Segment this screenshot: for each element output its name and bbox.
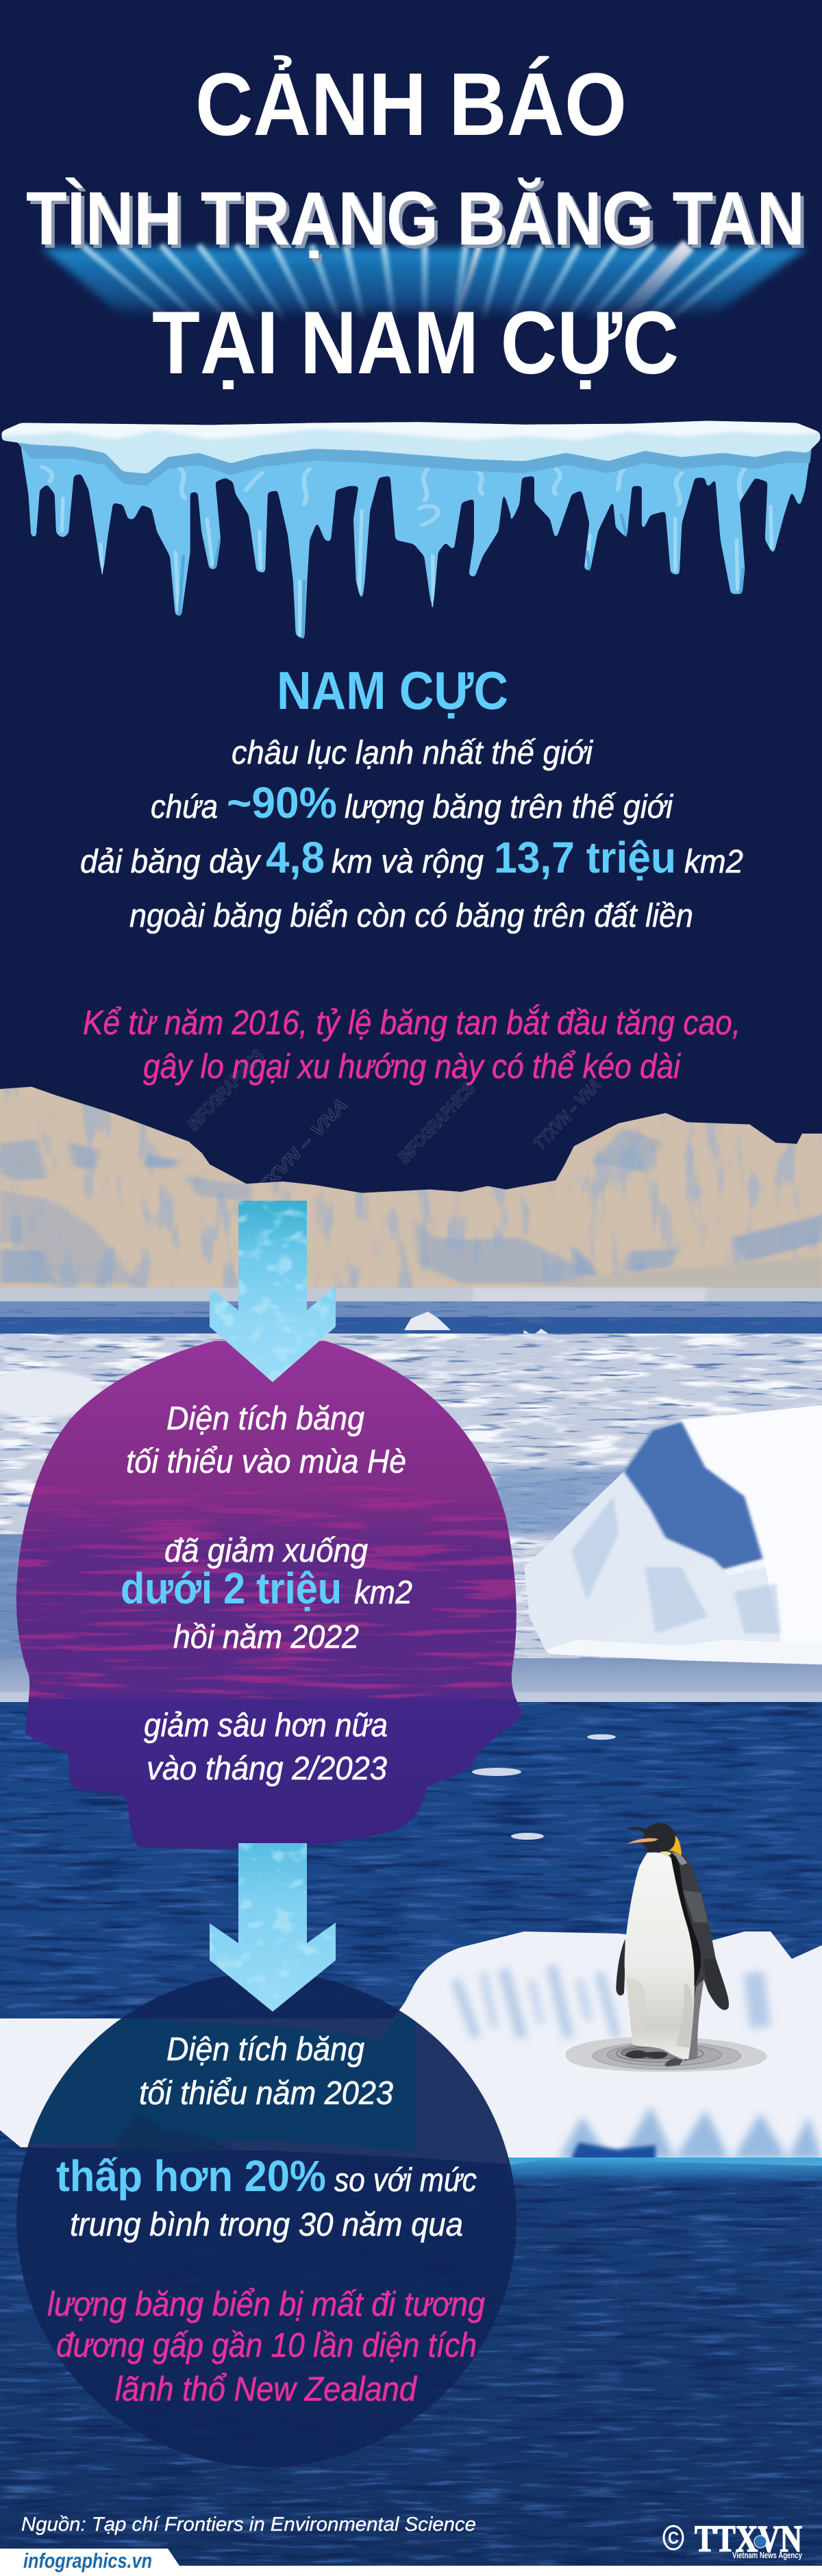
icon: emperor penguin	[566, 1823, 767, 2072]
distant mountains	[0, 1082, 822, 1295]
iceberg	[524, 1405, 822, 1664]
line: ice sheet size: km2	[684, 844, 743, 880]
line: ice sheet size	[80, 833, 743, 882]
circle text: đương gấp gần 10 lần diện tích	[56, 2326, 477, 2364]
light glow under the title	[42, 245, 807, 323]
dark neck stripe	[670, 1853, 701, 1986]
snow cap white top	[2, 421, 820, 440]
blob text: giảm sâu hơn nữa	[144, 1708, 388, 1744]
snow cap	[2, 421, 820, 473]
globe in the V	[754, 2536, 767, 2548]
line: land ice: ngoài băng biển còn có băng trên đất liền	[129, 898, 693, 934]
agency name: Vietnam News Agency	[732, 2551, 802, 2560]
line: ice sheet size: 13,7 triệu	[494, 833, 676, 882]
circle text: thấp hơn 20%	[56, 2151, 326, 2201]
pink callout	[83, 1003, 740, 1086]
circle text: Diện tích băng	[166, 2031, 364, 2068]
sea	[0, 1288, 822, 2576]
icon: icicles with snow cap	[2, 421, 820, 639]
blob text: Diện tích băng	[166, 1401, 364, 1437]
ground shadow	[566, 2037, 767, 2072]
blob text: vào tháng 2/2023	[147, 1751, 387, 1787]
copyright mark: C	[668, 2529, 679, 2548]
belly	[625, 1853, 695, 2060]
watermarks: TTXVN – VNA	[244, 1095, 351, 1208]
blob text	[121, 1401, 412, 1787]
orange beak	[627, 1838, 658, 1844]
yellow ear patch	[669, 1836, 682, 1855]
line: 90 percent of the ice	[151, 778, 673, 827]
watermarks: INFOGRAPHICS	[184, 1046, 268, 1134]
blob text: km2	[354, 1575, 412, 1611]
snow cap shadow layer	[2, 421, 820, 473]
hazy foreground hill	[544, 1257, 822, 1288]
left flipper	[616, 1939, 625, 1995]
pink callout: gây lo ngại xu hướng này có thể kéo dài	[143, 1047, 682, 1086]
logo: TTXVN	[664, 2518, 802, 2560]
purple melting shape	[0, 1336, 548, 1856]
small ice floes on the sea	[472, 1734, 616, 1840]
dark blue ice cave	[571, 2142, 656, 2162]
watermarks: TTXVN – VNA	[530, 1075, 605, 1153]
title line 1: CẢNH BÁO	[195, 54, 627, 154]
line: 90 percent of the ice: ~90%	[227, 778, 337, 827]
title line 3: TẠI NAM CỰC	[152, 292, 679, 392]
copyright mark	[664, 2526, 683, 2549]
circle text: tối thiểu năm 2023	[139, 2075, 393, 2112]
shoreline ice and blue water bands	[0, 1288, 822, 1348]
arrow: first ice arrow	[206, 1199, 342, 1384]
blob text: tối thiểu vào mùa Hè	[126, 1444, 406, 1480]
arrow: second ice arrow	[210, 1843, 336, 2012]
feet	[625, 2050, 668, 2059]
circle text: trung bình trong 30 năm qua	[70, 2207, 463, 2243]
back and wing	[670, 1851, 729, 2060]
blob text: hồi năm 2022	[173, 1619, 359, 1655]
foreground ice floe	[0, 1931, 822, 2186]
circle text: lượng băng biển bị mất đi tương	[47, 2285, 485, 2323]
dark circle	[0, 1973, 516, 2467]
pink callout: Kể từ năm 2016, tỷ lệ băng tan bắt đầu tăng cao,	[83, 1003, 740, 1042]
line: 90 percent of the ice: lượng băng trên thế giới	[345, 789, 673, 825]
line: ice sheet size: 4,8	[266, 833, 325, 882]
title	[26, 54, 808, 392]
blob text: đã giảm xuống	[164, 1533, 368, 1569]
source line: Nguồn: Tạp chí Frontiers in Environmental Science	[21, 2514, 476, 2536]
watermarks	[184, 1046, 605, 1208]
circle text: so với mức	[334, 2162, 477, 2199]
intro text panel	[80, 660, 743, 1086]
line: ice sheet size: km và rộng	[332, 844, 484, 880]
blob text: dưới 2 triệu	[121, 1564, 342, 1613]
icicle highlights	[42, 467, 772, 637]
line: coldest continent: châu lục lạnh nhất thế giới	[232, 735, 593, 771]
circle text	[47, 2031, 485, 2408]
heading: Nam Cuc: NAM CỰC	[277, 660, 508, 721]
head	[627, 1823, 677, 1852]
panel: summer minimum blob	[0, 1336, 548, 1856]
background photo: antarctic landscape	[0, 1082, 822, 2576]
darker band below snow	[16, 440, 812, 486]
line: ice sheet size: dải băng dày	[80, 844, 262, 880]
footer site name: infographics.vn	[23, 2549, 152, 2573]
icicle body	[21, 444, 810, 639]
pack ice field	[0, 1334, 822, 1702]
watermarks: INFOGRAPHICS	[395, 1079, 479, 1167]
footer white bar	[0, 2549, 822, 2576]
circle text: lãnh thổ New Zealand	[115, 2370, 418, 2408]
panel: 2023 minimum circle	[0, 1973, 516, 2467]
line: 90 percent of the ice: chứa	[151, 789, 218, 825]
